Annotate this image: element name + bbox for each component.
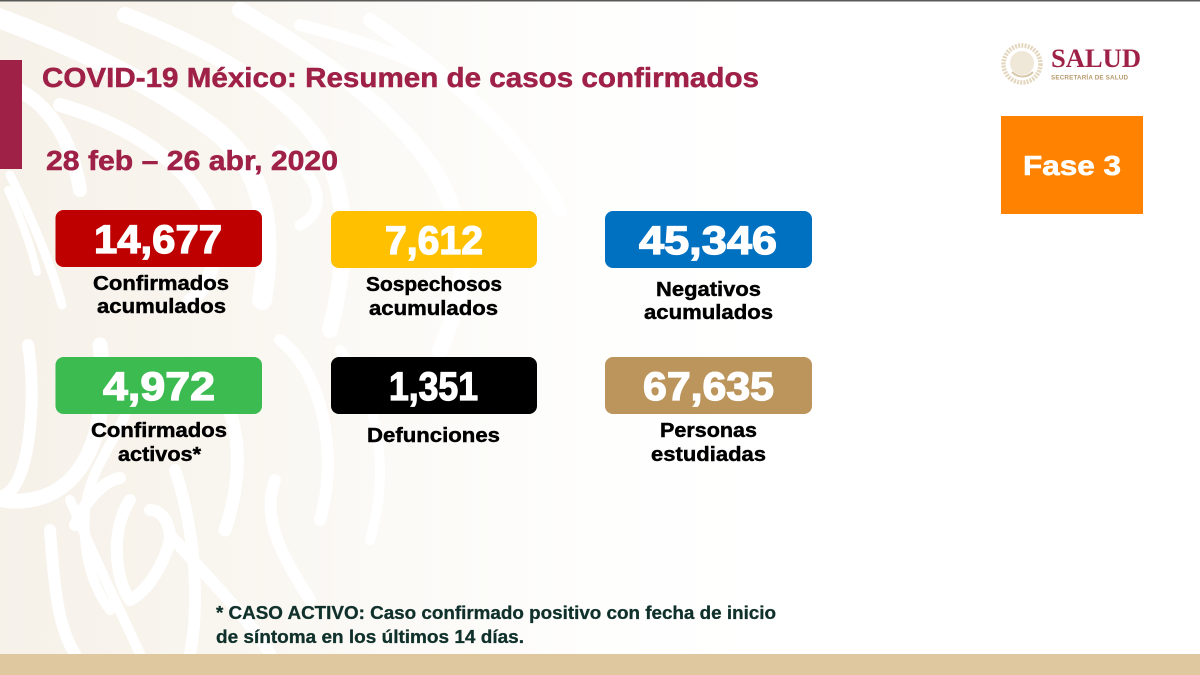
- stat: sospechosos acumulados: 7,612: [385, 219, 483, 263]
- stat: defunciones: [331, 357, 537, 447]
- title: COVID-19 México: Resumen de casos confirmados: [42, 62, 759, 93]
- wordmark: SALUD: [1051, 44, 1141, 73]
- footnote: * CASO ACTIVO: Caso confirmado positivo con fecha de inicio: [216, 603, 776, 623]
- stat: sospechosos acumulados: Sospechosos: [366, 274, 502, 296]
- stat: personas estudiadas: [605, 357, 812, 466]
- phase badge: Fase 3: [1023, 150, 1121, 181]
- stat: confirmados activos: [56, 357, 262, 466]
- footer band: [0, 654, 1200, 675]
- stat: personas estudiadas: 67,635: [643, 365, 774, 409]
- stat: negativos acumulados: Negativos: [656, 279, 761, 301]
- footnote: de síntoma en los últimos 14 días.: [216, 627, 524, 647]
- stat: sospechosos acumulados: acumulados: [369, 298, 498, 320]
- stat: confirmados acumulados: Confirmados: [93, 273, 229, 295]
- stat: confirmados activos: 4,972: [103, 365, 215, 409]
- stat: negativos acumulados: [605, 211, 812, 324]
- stat: sospechosos acumulados: [331, 211, 537, 320]
- icon: national emblem: [1004, 46, 1040, 82]
- stat: confirmados activos: activos*: [118, 444, 201, 466]
- stat: confirmados acumulados: [56, 210, 262, 318]
- footnote: [216, 603, 776, 647]
- stat: personas estudiadas: estudiadas: [651, 444, 766, 466]
- stat: defunciones: Defunciones: [367, 425, 500, 447]
- stat: confirmados acumulados: acumulados: [97, 296, 226, 318]
- accent bar: [0, 60, 22, 169]
- subtitle: SECRETARÍA DE SALUD: [1051, 72, 1128, 82]
- stat: negativos acumulados: acumulados: [644, 302, 773, 324]
- stat: defunciones: 1,351: [389, 365, 478, 409]
- background pattern: [0, 0, 760, 654]
- date range: 28 feb – 26 abr, 2020: [46, 145, 338, 176]
- stat: negativos acumulados: 45,346: [639, 219, 777, 263]
- logo: Salud: [1004, 44, 1141, 82]
- phase badge: [1001, 116, 1143, 214]
- stat: confirmados acumulados: 14,677: [94, 218, 222, 262]
- stat: confirmados activos: Confirmados: [91, 420, 227, 442]
- stat: personas estudiadas: Personas: [660, 420, 757, 442]
